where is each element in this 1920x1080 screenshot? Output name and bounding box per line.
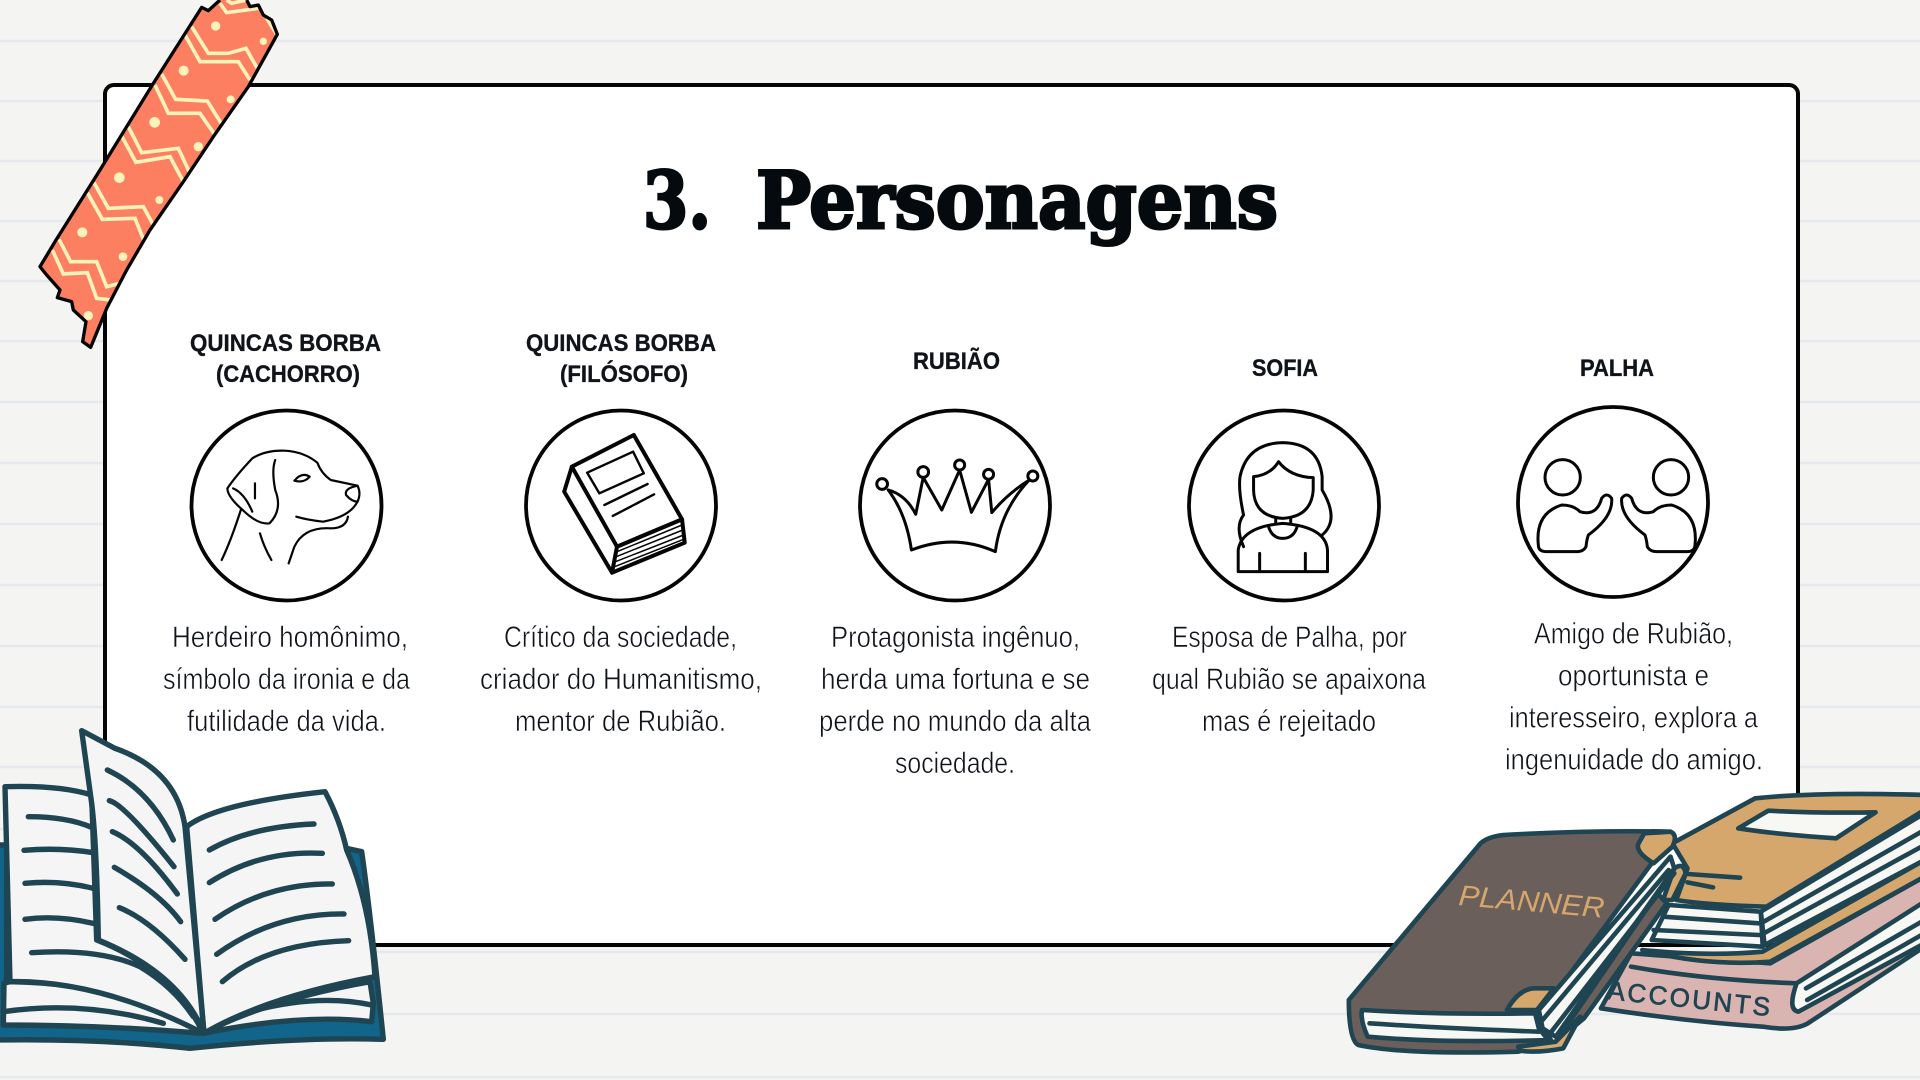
book: tan notebook <box>1642 794 1920 963</box>
description <box>480 621 762 738</box>
description: símbolo da ironia e da <box>163 663 410 696</box>
heading: (CACHORRO) <box>216 361 360 388</box>
heading <box>190 330 381 388</box>
description: oportunista e <box>1558 660 1709 692</box>
heading: QUINCAS BORBA <box>526 330 716 357</box>
character: Quincas Borba (filósofo) <box>480 330 762 738</box>
heading: RUBIÃO <box>913 347 1000 375</box>
icon: dog <box>192 410 382 600</box>
description: mas é rejeitado <box>1202 705 1376 738</box>
description: qual Rubião se apaixona <box>1152 663 1426 696</box>
description: herda uma fortuna e se <box>821 663 1090 696</box>
panel: white card <box>105 85 1798 945</box>
heading: PALHA <box>1580 355 1654 382</box>
description: Herdeiro homônimo, <box>172 621 408 654</box>
illustration: open book <box>0 731 383 1048</box>
icon: crown <box>860 410 1050 600</box>
character: Quincas Borba (cachorro) <box>163 330 410 738</box>
character: Palha <box>1505 355 1763 776</box>
title: Personagens <box>756 154 1278 247</box>
description: futilidade da vida. <box>187 705 386 738</box>
icon: book <box>526 410 716 600</box>
heading: SOFIA <box>1252 355 1318 382</box>
label: accounts: ACCOUNTS <box>1606 975 1772 1022</box>
description: ingenuidade do amigo. <box>1505 744 1763 776</box>
description <box>1152 621 1426 738</box>
description: criador do Humanitismo, <box>480 663 762 696</box>
icon: woman <box>1189 410 1379 600</box>
heading: QUINCAS BORBA <box>190 330 381 357</box>
book: planner <box>1349 831 1686 1052</box>
description <box>163 621 410 738</box>
icon: two people <box>1518 407 1708 597</box>
character: Sofia <box>1152 355 1426 738</box>
description: interesseiro, explora a <box>1509 702 1758 734</box>
label: planner: PLANNER <box>1457 880 1606 925</box>
description: sociedade. <box>895 747 1015 780</box>
illustration: stack of books <box>1349 794 1920 1052</box>
title: 3. <box>643 154 711 247</box>
description: Esposa de Palha, por <box>1172 621 1407 654</box>
heading: (FILÓSOFO) <box>560 360 688 388</box>
description <box>819 621 1091 780</box>
description: Crítico da sociedade, <box>504 621 737 654</box>
character: Rubião <box>819 347 1091 780</box>
decorative washi tape <box>40 0 277 347</box>
description: perde no mundo da alta <box>819 705 1091 738</box>
description: mentor de Rubião. <box>515 705 726 738</box>
heading <box>526 330 716 388</box>
description: Protagonista ingênuo, <box>831 621 1080 654</box>
description: Amigo de Rubião, <box>1534 618 1733 650</box>
description <box>1505 618 1763 776</box>
book: accounts (pink) <box>1601 877 1920 1029</box>
